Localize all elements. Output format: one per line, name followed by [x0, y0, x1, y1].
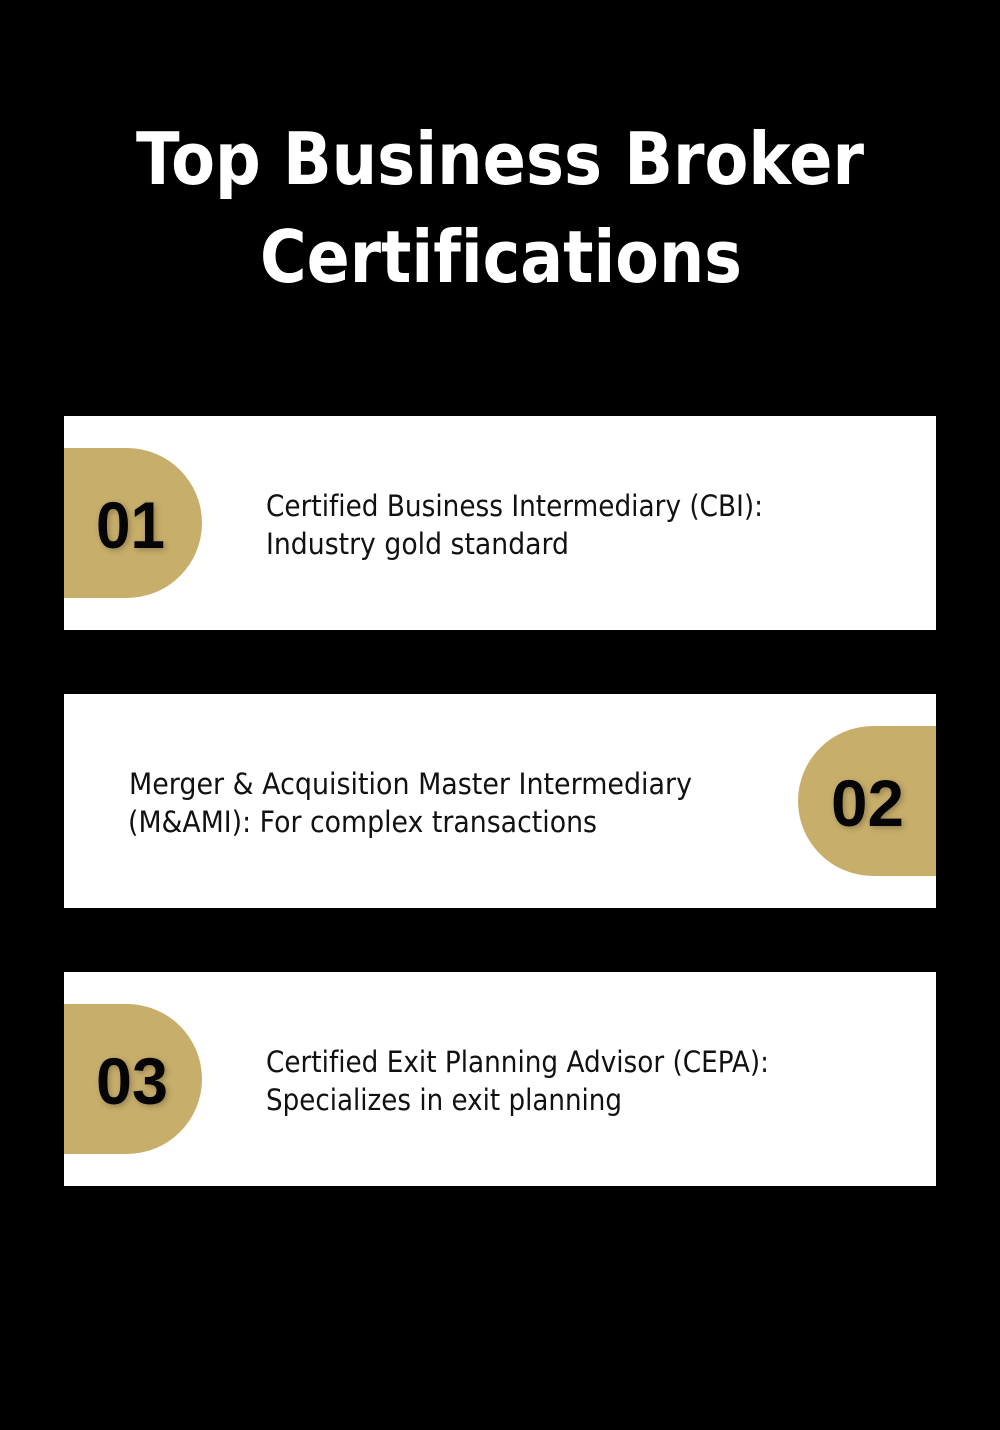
badge: 03: [64, 1004, 202, 1154]
text: Certified Exit Planning Advisor: Specializes in exit planning: [266, 1083, 622, 1117]
text: Merger and Acquisition Master Intermediary: Merger & Acquisition Master Intermediary: [129, 767, 692, 801]
text: Certified Business Intermediary: Certified Business Intermediary (CBI):: [266, 489, 763, 523]
panel: certification 03: [64, 972, 936, 1186]
panel: certification 02: [64, 694, 936, 908]
text: Merger and Acquisition Master Intermediary: [128, 767, 692, 839]
badge: 03: 03: [96, 1044, 168, 1118]
title: [136, 117, 864, 299]
text: Certified Exit Planning Advisor: Certified Exit Planning Advisor (CEPA):: [266, 1045, 769, 1079]
text: Merger and Acquisition Master Intermediary: (M&AMI): For complex transactions: [128, 805, 597, 839]
text: Certified Exit Planning Advisor: [266, 1045, 769, 1117]
text: Certified Business Intermediary: Industry gold standard: [266, 527, 569, 561]
text: Certified Business Intermediary: [266, 489, 763, 561]
badge: 02: 02: [831, 766, 904, 840]
panel: certification 01: [64, 416, 936, 630]
title: Certifications: [260, 215, 742, 299]
badge: 01: 01: [96, 488, 165, 562]
badge: 02: [798, 726, 936, 876]
badge: 01: [64, 448, 202, 598]
title: Top Business Broker: [136, 117, 864, 201]
